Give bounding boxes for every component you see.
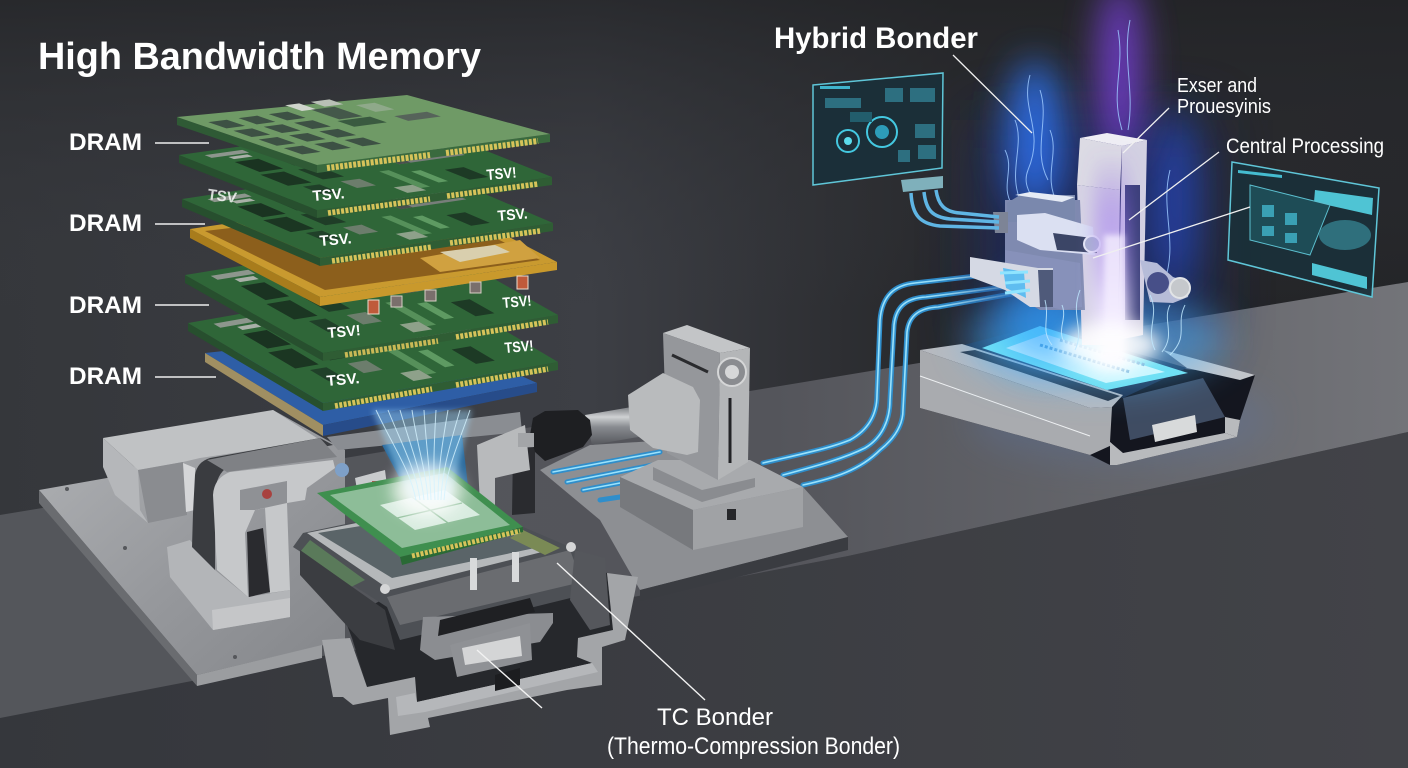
lower head xyxy=(1005,250,1082,310)
right camera lens xyxy=(1140,260,1190,303)
dark backdrop and top bracket under stack xyxy=(327,412,522,488)
TSV labels: TSV. xyxy=(319,230,352,250)
hybrid bonder glowing stage xyxy=(965,294,1225,390)
flames xyxy=(1000,0,1197,365)
hybrid bonder base xyxy=(920,325,1255,465)
callout: central processing: Central Processing xyxy=(1226,135,1384,158)
board 1 xyxy=(177,94,550,173)
TSV labels: TSV xyxy=(206,186,238,207)
lower clamp and sensor block xyxy=(420,598,553,691)
camera actuator xyxy=(518,325,803,550)
left holographic panel xyxy=(813,73,943,185)
vertical plasma beam xyxy=(1045,150,1185,370)
TSV labels: TSV. xyxy=(326,370,360,390)
left panel connector and cables xyxy=(901,176,999,228)
gear motor xyxy=(628,373,700,455)
TC bonder caption: TC Bonder xyxy=(657,704,773,731)
DRAM labels with leader lines xyxy=(69,129,216,390)
TC bonder stepped housing xyxy=(322,560,638,735)
TSV labels: TSV. xyxy=(497,205,528,225)
title: High Bandwidth Memory xyxy=(38,36,481,78)
TC bonder arch arm xyxy=(167,438,390,630)
column body xyxy=(663,325,750,480)
actuator base xyxy=(620,460,803,550)
gold interposer layer xyxy=(190,194,557,314)
head backing body xyxy=(1005,200,1085,310)
blue layer under stack xyxy=(205,330,537,436)
DRAM labels with leader lines: DRAM xyxy=(69,129,142,156)
blue data cables xyxy=(553,273,1023,500)
conveyor surface band xyxy=(0,282,1408,718)
callout: exser and prouesyinis xyxy=(1177,75,1271,118)
TC bonder green substrate xyxy=(317,467,523,565)
hybrid bonder callout lines xyxy=(953,55,1250,258)
red capacitors xyxy=(368,276,528,314)
TSV labels: TSV! xyxy=(327,322,361,342)
board 5 xyxy=(188,282,558,411)
arch stepped foot xyxy=(167,540,290,630)
DRAM labels with leader lines: DRAM xyxy=(69,363,142,390)
ambient blue haze behind hybrid head xyxy=(980,120,1210,350)
light fountain over chip xyxy=(372,410,472,516)
HBM stack xyxy=(177,94,558,411)
TC bonder connector lines xyxy=(477,563,705,708)
motor barrel xyxy=(1053,233,1100,253)
TSV labels: TSV! xyxy=(502,293,532,312)
right holographic panel xyxy=(1228,162,1379,297)
centre base plate xyxy=(540,440,848,601)
side connector xyxy=(993,212,1008,233)
hybrid bonder heading: Hybrid Bonder xyxy=(774,22,978,55)
middle housing xyxy=(1017,213,1095,255)
callout: exser and prouesyinis: Exser and xyxy=(1177,75,1257,97)
left connector box xyxy=(970,257,1053,307)
TC bonder caption xyxy=(607,704,900,760)
TC bonder caption: (Thermo-Compression Bonder) xyxy=(607,733,900,760)
callout: exser and prouesyinis: Prouesyinis xyxy=(1177,96,1271,118)
hybrid bonder head assembly xyxy=(970,192,1100,310)
right arm and posts xyxy=(477,425,535,515)
TSV labels: TSV! xyxy=(486,164,517,184)
board 4 xyxy=(185,237,558,361)
board 2 xyxy=(179,122,552,218)
side block xyxy=(103,410,320,523)
TSV labels xyxy=(206,164,534,390)
steel cylinder xyxy=(585,405,650,445)
TSV labels: TSV! xyxy=(504,338,534,357)
DRAM labels with leader lines: DRAM xyxy=(69,292,142,319)
cable ends in connector xyxy=(1000,272,1030,293)
upper head xyxy=(1007,192,1075,222)
hybrid bonder column xyxy=(1077,133,1147,345)
left base plate xyxy=(39,410,345,686)
TC bonder bonding frame xyxy=(293,500,610,650)
black knob xyxy=(518,410,592,461)
board 3 xyxy=(182,164,553,266)
TSV labels: TSV. xyxy=(312,185,345,205)
DRAM labels with leader lines: DRAM xyxy=(69,210,142,237)
